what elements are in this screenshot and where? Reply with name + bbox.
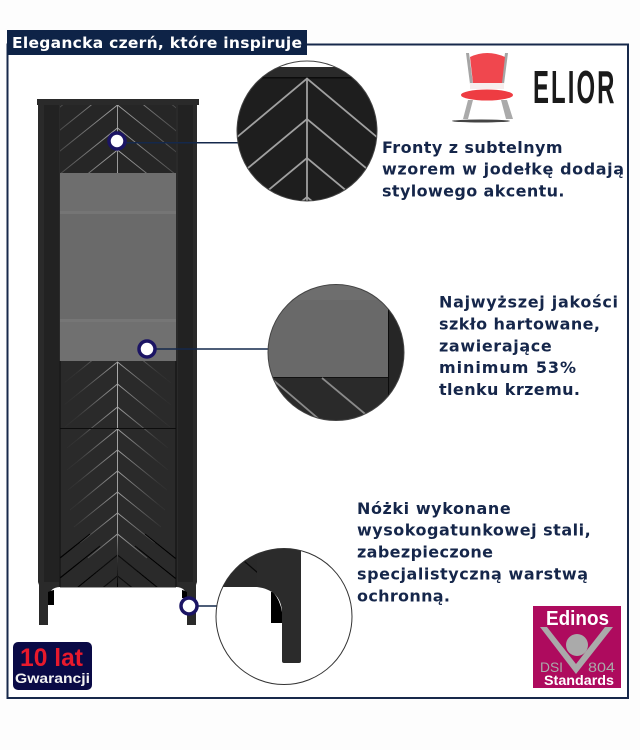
cabinet body: side columns and legs — [38, 104, 197, 625]
badge: Edinos standards: Edinos — [546, 608, 609, 630]
detail circle: glass — [268, 284, 404, 421]
top plate — [37, 99, 199, 105]
text block: glass: tlenku krzemu. — [439, 380, 580, 399]
marker: leg — [181, 598, 197, 614]
text block: glass: zawierające — [439, 336, 552, 355]
text block: legs: specjalistyczną warstwą — [357, 564, 588, 584]
text block: fronts: Fronty z subtelnym — [382, 138, 562, 157]
badge: 10 year warranty — [13, 642, 92, 690]
upper herringbone front — [60, 105, 176, 173]
title — [7, 30, 307, 55]
lower herringbone front — [60, 361, 176, 587]
cabinet illustration — [37, 61, 199, 625]
text block: glass: szkło hartowane, — [439, 314, 600, 334]
badge: Edinos standards: DSI — [540, 659, 563, 675]
glass door — [60, 173, 176, 361]
marker: glass — [139, 341, 155, 357]
detail circle: leg — [216, 548, 352, 685]
badge: Edinos standards: Standards — [544, 672, 614, 688]
icon: red chair — [452, 53, 513, 122]
wordmark: ELIOR — [533, 62, 616, 113]
badge: 10 year warranty: 10 lat — [20, 644, 84, 672]
text block: legs: wysokogatunkowej stali, — [357, 521, 591, 540]
text block: legs: Nóżki wykonane — [357, 499, 511, 518]
connector lines — [125, 143, 269, 606]
text block: legs: zabezpieczone — [357, 543, 493, 562]
text block: fronts: stylowego akcentu. — [382, 182, 564, 200]
detail circle: herringbone front — [236, 60, 378, 202]
title: Elegancka czerń, które inspiruje — [12, 34, 302, 52]
text block: legs: ochronną. — [357, 586, 450, 606]
badge: 10 year warranty: Gwarancji — [15, 670, 90, 686]
badge: Edinos standards — [533, 606, 621, 688]
text block: glass: minimum 53% — [439, 358, 576, 377]
text block: legs — [357, 499, 591, 606]
badge: Edinos standards: 804 — [588, 659, 615, 675]
text block: fronts — [382, 138, 624, 200]
text block: glass — [439, 293, 618, 399]
marker: front — [109, 133, 125, 149]
text block: fronts: wzorem w jodełkę dodają — [382, 160, 624, 179]
text block: glass: Najwyższej jakości — [439, 293, 618, 312]
logo: Elior — [452, 53, 616, 122]
